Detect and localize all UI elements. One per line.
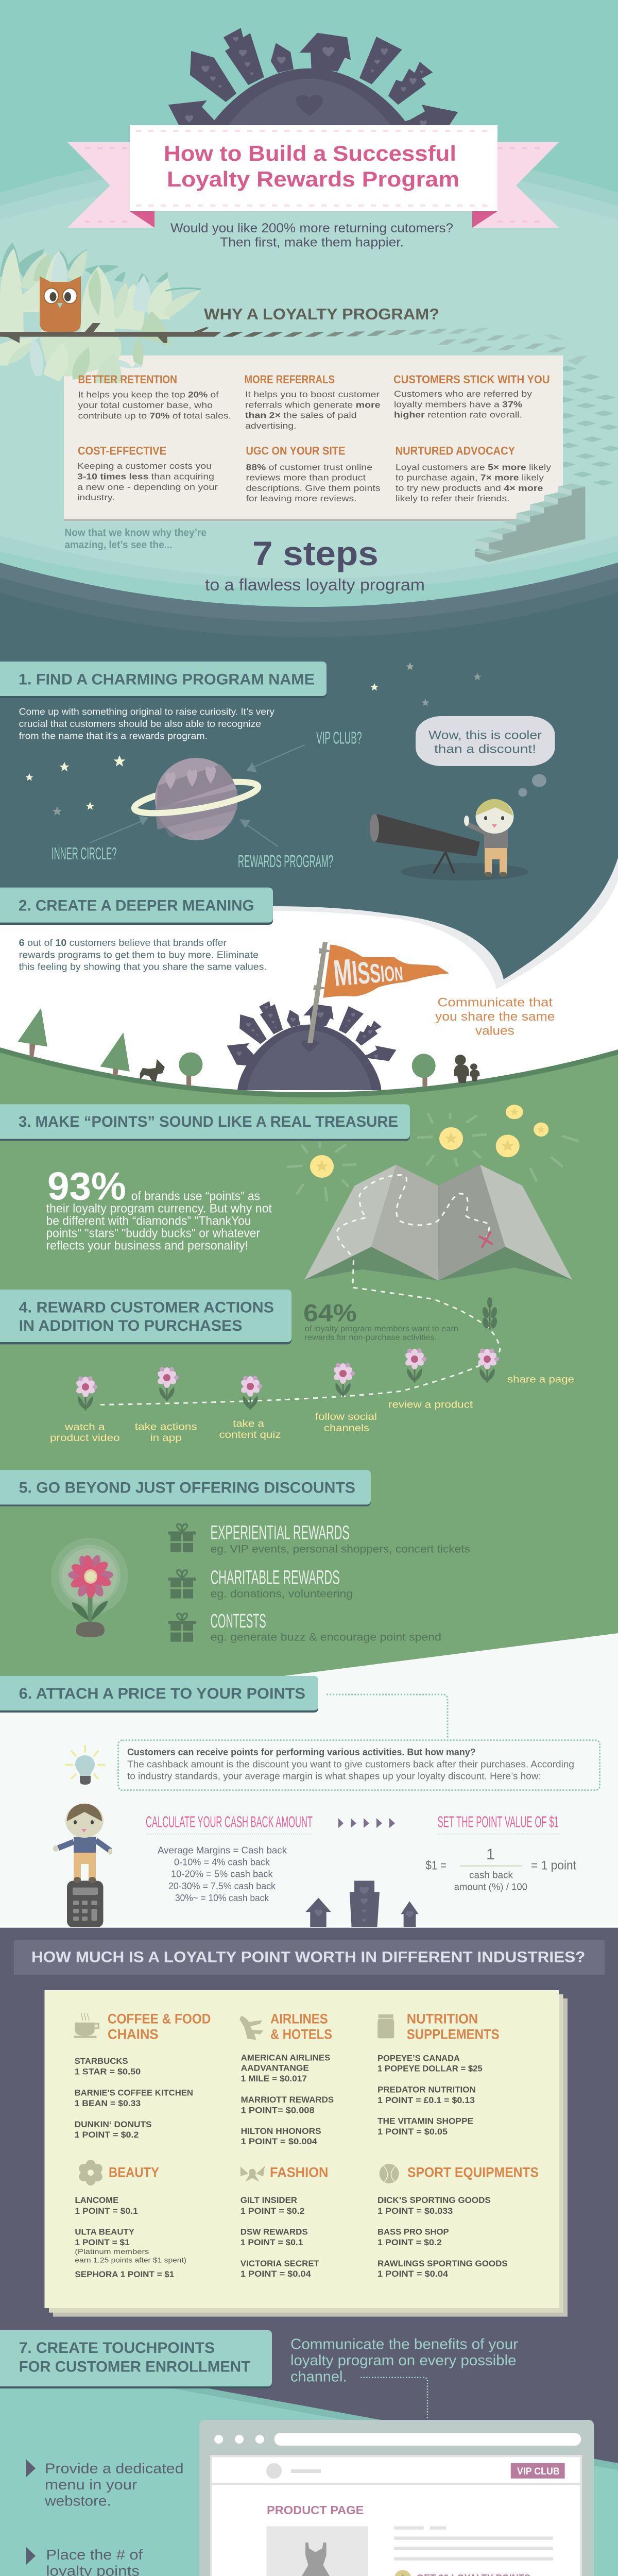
- category: sport equipments: DICK’S SPORTING GOODS: [377, 2196, 491, 2205]
- text: communicate that you share the same values: [435, 995, 555, 1038]
- category: coffee and food chains: 1 BEAN = $0.33: [75, 2099, 141, 2108]
- text: communicate that you share the same values: values: [475, 1024, 514, 1038]
- icon: flower take a quiz: [239, 1375, 263, 1410]
- heading: 7 steps: 7 steps: [252, 534, 379, 572]
- card: customers stick with you: CUSTOMERS STICK WITH YOU: [393, 373, 550, 386]
- icon: child on calculator: [53, 1804, 112, 1927]
- label: follow social channels: channels: [324, 1423, 369, 1434]
- icon: coffee cup: [74, 2013, 98, 2038]
- step 3 banner: [0, 1104, 410, 1141]
- step 2 body: this feeling by showing that you share the same values.: [19, 961, 267, 972]
- step 7 heading line two: FOR CUSTOMER ENROLLMENT: [19, 2358, 250, 2375]
- icon: tennis ball: [380, 2164, 399, 2183]
- category: coffee and food chains: 1 STAR = $0.50: [75, 2067, 141, 2077]
- icon: trees, dog and people: [18, 1008, 479, 1087]
- icon: coin rays: [287, 1113, 578, 1201]
- step 2 body: [19, 937, 267, 972]
- step 3 heading: 3. MAKE “POINTS” SOUND LIKE A REAL TREASURE: [19, 1113, 398, 1130]
- step 4 heading: 4. REWARD CUSTOMER ACTIONS: [19, 1299, 274, 1316]
- category: nutrition supplements: SUPPLEMENTS: [407, 2026, 500, 2042]
- title banner: [67, 125, 559, 228]
- icon: skyline: [305, 1881, 419, 1927]
- card: ugc on your site: reviews more than product: [246, 473, 366, 483]
- category: sport equipments: 1 POINT = $0.2: [377, 2238, 442, 2247]
- category: fashion: DSW REWARDS: [241, 2228, 308, 2237]
- stat: 64 percent: of loyalty program members want to earn: [305, 1325, 458, 1333]
- category: coffee and food chains: 1 POINT = $0.2: [75, 2130, 139, 2140]
- step 2 banner: [0, 888, 273, 925]
- text: now that we know: amazing, let’s see the...: [65, 539, 172, 551]
- step 7 banner: [0, 2330, 272, 2388]
- category: nutrition supplements: [377, 2011, 500, 2137]
- text: communicate the benefits: loyalty program on every possible: [290, 2352, 516, 2369]
- background: hill one: [0, 145, 618, 227]
- icon: glowing flower: [51, 1538, 128, 1637]
- icon: treasure map: [304, 1165, 572, 1280]
- background: green hill edge: [0, 1047, 618, 1133]
- panel background: why a loyalty program: [64, 355, 563, 521]
- background: purple section: [0, 1927, 618, 2576]
- callout: how many points: Customers can receive points for performing various activities. But how many?: [127, 1747, 476, 1757]
- category: beauty: earn 1.25 points after $1 spent): [75, 2257, 186, 2264]
- category: airlines and hotels: MARRIOTT REWARDS: [241, 2095, 334, 2105]
- label: share a page: share a page: [507, 1374, 574, 1385]
- card: ugc on your site: descriptions. Give them points: [246, 483, 380, 493]
- text: communicate that you share the same values: you share the same: [435, 1010, 555, 1024]
- table: margins to cash back: [158, 1845, 287, 1903]
- icon: sprig: [482, 1297, 498, 1330]
- icon: bottle: [377, 2014, 394, 2038]
- card: ugc on your site: 88% of customer trust online: [246, 462, 372, 472]
- subheading: to a flawless loyalty program: to a flawless loyalty program: [205, 575, 425, 594]
- category: airlines and hotels: 1 MILE = $0.017: [241, 2074, 307, 2083]
- item: experiential rewards: [211, 1522, 470, 1555]
- card: nurtured advocacy: likely to refer their friends.: [396, 494, 510, 503]
- left ribbon: [67, 142, 154, 228]
- step 1 body: from the name that it’s a rewards program.: [19, 730, 208, 741]
- callout: how many points: to industry standards, your average margin is what shapes up your loyalty discount. Here’s how:: [127, 1771, 541, 1782]
- card: more referrals: [244, 373, 380, 431]
- decorative dashes from the branch: [222, 328, 587, 365]
- background: hill three: [0, 175, 618, 227]
- card: ugc on your site: [246, 445, 380, 503]
- label: take a content quiz: take a: [233, 1419, 265, 1430]
- heading: product page: PRODUCT PAGE: [267, 2503, 364, 2517]
- card: more referrals: than 2× the sales of paid: [245, 411, 357, 420]
- background: light teal intro area: [0, 0, 618, 579]
- category: beauty: 1 POINT = $0.1: [75, 2207, 138, 2216]
- icon: foliage: [0, 243, 201, 383]
- label: take actions in app: take actions: [135, 1421, 197, 1432]
- background: sky: [0, 0, 618, 222]
- card: customers stick with you: [393, 373, 550, 420]
- card: ugc on your site: UGC ON YOUR SITE: [246, 445, 345, 457]
- text: now that we know: Now that we know why they’re: [65, 527, 207, 538]
- arrow: rewards program: [239, 819, 278, 846]
- category: fashion: [241, 2164, 329, 2279]
- card: nurtured advocacy: Loyal customers are 5× more likely: [396, 462, 552, 472]
- category: beauty: (Platinum members: [75, 2248, 149, 2256]
- stat: 93 percent: reflects your business and personality!: [46, 1239, 248, 1253]
- table: margins to cash back: 0-10% = 4% cash back: [174, 1857, 270, 1867]
- step 1 heading: 1. FIND A CHARMING PROGRAM NAME: [19, 671, 315, 688]
- background: pale section six: [0, 1633, 618, 1927]
- card: customers stick with you: loyalty members have a 37%: [394, 399, 522, 409]
- step 5 heading: 5. GO BEYOND JUST OFFERING DISCOUNTS: [19, 1479, 355, 1496]
- dotted connector two: [360, 2378, 427, 2419]
- icon: telescope and person: [370, 799, 528, 880]
- category: nutrition supplements: PREDATOR NUTRITION: [377, 2086, 476, 2095]
- background: dark teal swoosh section: [0, 515, 618, 979]
- icon: gift one: [168, 1524, 196, 1552]
- icon: coins: [310, 1105, 548, 1178]
- image: product dress: [266, 2526, 368, 2576]
- category: airlines and hotels: [239, 2011, 334, 2146]
- category: nutrition supplements: 1 POPEYE DOLLAR = $25: [377, 2064, 483, 2074]
- icon: flower share a page: [476, 1347, 500, 1383]
- list: provide a dedicated menu: webstore.: [44, 2493, 111, 2509]
- text: communicate the benefits: Communicate the benefits of your: [290, 2336, 518, 2352]
- step 2 body: rewards programs to get them to buy more. Eliminate: [19, 949, 259, 960]
- stat: 93 percent: [46, 1165, 272, 1253]
- table: margins to cash back: Average Margins = Cash back: [158, 1845, 287, 1855]
- label: review a product: review a product: [388, 1400, 473, 1411]
- subtitle: Would you like 200% more returning cutomers?: [170, 221, 453, 235]
- table: margins to cash back: 30%~ = 10% cash back: [175, 1893, 269, 1903]
- category: beauty: [75, 2160, 186, 2279]
- category: beauty: 1 POINT = $1: [75, 2238, 130, 2247]
- icon: beauty flower: [77, 2160, 105, 2185]
- step 6 banner: [0, 1676, 318, 1713]
- icon: flower watch video: [75, 1375, 98, 1411]
- category: airlines and hotels: & HOTELS: [270, 2026, 332, 2042]
- category: fashion: 1 POINT = $0.04: [241, 2269, 312, 2279]
- category: beauty: BEAUTY: [109, 2164, 159, 2180]
- step 5 banner: [0, 1470, 371, 1506]
- card: cost-effective: [77, 445, 218, 502]
- heading panel: loyalty point worth: [0, 1927, 618, 1975]
- formula: point value: amount (%) / 100: [454, 1882, 527, 1892]
- item: experiential rewards: EXPERIENTIAL REWARDS: [211, 1522, 350, 1544]
- step 4 heading line two: IN ADDITION TO PURCHASES: [19, 1317, 243, 1334]
- right ribbon: [472, 142, 559, 228]
- dotted connector: [327, 1694, 448, 1738]
- card: customers stick with you: higher retention rate overall.: [394, 410, 522, 420]
- label: inner circle: INNER CIRCLE?: [52, 844, 116, 863]
- callout: speech bubble: than a discount!: [434, 742, 536, 755]
- category: nutrition supplements: 1 POINT = £0.1 = $0.13: [377, 2096, 475, 2105]
- item: contests: eg. generate buzz & encourage point spend: [211, 1631, 441, 1643]
- stat: 93 percent: be different with “diamonds” "ThankYou: [46, 1214, 251, 1228]
- background: green section: [0, 1053, 618, 1700]
- card: cost-effective: COST-EFFECTIVE: [78, 445, 166, 457]
- step 1 body: Come up with something original to raise curiosity. It’s very: [19, 706, 275, 717]
- card: cost-effective: industry.: [77, 493, 115, 502]
- stat: 64 percent: 64%: [303, 1299, 357, 1327]
- text: communicate the benefits: channel.: [290, 2368, 347, 2385]
- icon: flower follow social: [332, 1362, 355, 1397]
- category: coffee and food chains: STARBUCKS: [75, 2057, 128, 2066]
- card: customers stick with you: Customers who are referred by: [394, 389, 533, 399]
- background: hill two: [0, 159, 618, 227]
- label: rewards program: REWARDS PROGRAM?: [238, 852, 333, 871]
- category: airlines and hotels: HILTON HHONORS: [241, 2127, 321, 2136]
- card: better retention: your total customer base, who: [78, 400, 213, 410]
- card: nurtured advocacy: NURTURED ADVOCACY: [396, 445, 515, 457]
- step 1 body: [19, 706, 275, 741]
- icon: branch: [0, 323, 221, 343]
- stars: [25, 663, 482, 816]
- category: coffee and food chains: [74, 2011, 211, 2140]
- icon: hero heart city emblem: [168, 28, 458, 181]
- icon: gift two: [168, 1570, 196, 1598]
- category: airlines and hotels: AMERICAN AIRLINES: [241, 2053, 330, 2062]
- category: sport equipments: RAWLINGS SPORTING GOODS: [377, 2259, 508, 2268]
- category: fashion: VICTORIA SECRET: [241, 2259, 319, 2268]
- stat: 93 percent: their loyalty program currency. But why not: [46, 1201, 272, 1216]
- callout: how many points: [118, 1740, 600, 1790]
- category: nutrition supplements: 1 POINT = $0.05: [377, 2127, 448, 2137]
- category: airlines and hotels: AIRLINES: [270, 2011, 328, 2026]
- icon: flower review a product: [404, 1347, 427, 1383]
- label: watch a product video: product video: [50, 1433, 120, 1444]
- step 1 body: crucial that customers should be also able to recognize: [19, 718, 261, 729]
- category: sport equipments: BASS PRO SHOP: [377, 2228, 449, 2237]
- icon: planet: [132, 758, 260, 840]
- category: coffee and food chains: COFFEE & FOOD: [108, 2011, 211, 2026]
- stat: 64 percent: rewards for non-purchase activities.: [305, 1333, 437, 1342]
- category: airlines and hotels: AADVANTANGE: [241, 2064, 309, 2073]
- category: nutrition supplements: THE VITAMIN SHOPPE: [377, 2117, 473, 2126]
- background: arc band one: [0, 0, 618, 590]
- background: white section two: [0, 876, 618, 1108]
- button: vip club: VIP CLUB: [517, 2466, 560, 2477]
- step 7 heading: 7. CREATE TOUCHPOINTS: [19, 2340, 215, 2357]
- card: more referrals: referrals which generate more: [245, 400, 380, 410]
- icon: small city emblem: [227, 1001, 397, 1090]
- list: place points on product page: [26, 2547, 159, 2576]
- list: provide a dedicated menu: menu in your: [45, 2477, 137, 2493]
- heading: calculate your cash back amount: CALCULATE YOUR CASH BACK AMOUNT: [146, 1812, 313, 1831]
- subtitle: Then first, make them happier.: [220, 235, 404, 249]
- item: charitable rewards: CHARITABLE REWARDS: [211, 1567, 340, 1589]
- icon: isometric stairs: [475, 483, 585, 562]
- icon: mission flag: [302, 942, 449, 1046]
- text: communicate that you share the same values: Communicate that: [438, 995, 553, 1009]
- item: charitable rewards: eg. donations, volunteering: [211, 1588, 353, 1600]
- list: provide a dedicated menu: [26, 2460, 184, 2509]
- text: now that we know: [65, 527, 207, 551]
- formula: point value: cash back: [469, 1870, 513, 1880]
- heading: why a loyalty program: WHY A LOYALTY PROGRAM?: [204, 305, 439, 323]
- background: teal section seven shadow: [174, 2388, 618, 2470]
- category: coffee and food chains: BARNIE'S COFFEE KITCHEN: [75, 2089, 193, 2098]
- step 4 banner: [0, 1290, 291, 1344]
- callout: speech bubble: Wow, this is cooler: [428, 728, 542, 742]
- decorative diamonds: [554, 366, 618, 485]
- category: fashion: 1 POINT = $0.1: [241, 2238, 303, 2247]
- card: ugc on your site: for leaving more reviews.: [246, 494, 356, 503]
- background: arc band three: [0, 0, 618, 622]
- stat: 64 percent: [303, 1299, 458, 1342]
- label: take a content quiz: [219, 1419, 281, 1440]
- item: contests: CONTESTS: [211, 1611, 266, 1632]
- arrow: vip club: [246, 745, 305, 772]
- label: follow social channels: follow social: [315, 1412, 377, 1422]
- background: arc band four: [0, 0, 618, 637]
- category: fashion: GILT INSIDER: [241, 2196, 297, 2205]
- mission label: MISSION: [332, 947, 404, 994]
- step 1 banner: [0, 662, 327, 698]
- category: nutrition supplements: NUTRITION: [407, 2011, 478, 2026]
- panel text: why a loyalty program: [77, 305, 552, 503]
- left fold: [130, 211, 154, 228]
- list: provide a dedicated menu: Provide a dedicated: [45, 2460, 184, 2476]
- product details: [394, 2526, 553, 2561]
- card: more referrals: MORE REFERRALS: [244, 373, 335, 386]
- card: nurtured advocacy: to try new products and 4× more: [396, 483, 543, 493]
- card: cost-effective: Keeping a customer costs you: [77, 461, 212, 471]
- category: fashion: 1 POINT = $0.2: [241, 2207, 305, 2216]
- stat: 93 percent: 93%: [47, 1165, 126, 1209]
- label: vip club: VIP CLUB?: [316, 728, 362, 747]
- title line two: Loyalty Rewards Program: [167, 167, 459, 191]
- step 2 body: 6 out of 10 customers believe that brands offer: [19, 937, 227, 948]
- card: cost-effective: a new one - depending on your: [77, 482, 218, 492]
- panel: industries paper: [44, 1990, 568, 2317]
- callout: speech bubble: [416, 716, 555, 796]
- white title card: [130, 125, 497, 211]
- category: beauty: ULTA BEAUTY: [75, 2228, 134, 2237]
- formula: point value: = 1 point: [531, 1858, 576, 1872]
- category: airlines and hotels: 1 POINT= $0.008: [241, 2106, 315, 2115]
- text: communicate the benefits: [290, 2336, 518, 2385]
- card: better retention: It helps you keep the top 20% of: [78, 390, 219, 400]
- stat: 93 percent: points" "stars" "buddy bucks" or whatever: [46, 1226, 260, 1240]
- table: margins to cash back: 20-30% = 7,5% cash back: [168, 1881, 276, 1891]
- icon: flower take actions: [156, 1366, 179, 1401]
- card: cost-effective: 3-10 times less than acquiring: [77, 472, 214, 481]
- category: sport equipments: [377, 2164, 539, 2279]
- arrows: chevrons: [338, 1818, 395, 1828]
- button: vip club: [511, 2463, 565, 2479]
- category: beauty: SEPHORA 1 POINT = $1: [75, 2270, 174, 2279]
- icon: owl: [40, 276, 81, 332]
- panel: browser mockup: [199, 2420, 594, 2576]
- card: better retention: BETTER RETENTION: [78, 373, 177, 386]
- arrow: inner circle: [90, 816, 148, 843]
- category: coffee and food chains: CHAINS: [108, 2026, 159, 2042]
- label: take actions in app: [135, 1421, 197, 1444]
- category: beauty: LANCOME: [75, 2196, 118, 2205]
- item: charitable rewards: [211, 1567, 353, 1600]
- step 2 heading: 2. CREATE A DEEPER MEANING: [19, 897, 254, 914]
- icon: plane: [239, 2016, 263, 2040]
- callout: how many points: The cashback amount is the discount you want to give customers back after their purchases. According: [127, 1759, 574, 1769]
- item: contests: [211, 1611, 441, 1643]
- category: fashion: FASHION: [270, 2164, 329, 2180]
- path: dashed trail: [100, 1260, 500, 1405]
- background: grey swoosh shadow: [0, 515, 618, 989]
- heading text: HOW MUCH IS A LOYALTY POINT WORTH IN DIFFERENT INDUSTRIES?: [31, 1949, 585, 1966]
- list: place points on product page: Place the # of: [46, 2547, 143, 2563]
- formula: point value: [425, 1846, 576, 1892]
- label: take actions in app: in app: [150, 1433, 182, 1444]
- right fold: [472, 211, 497, 228]
- title: How to Build a Successful: [164, 141, 456, 165]
- background: teal section seven: [0, 2388, 618, 2576]
- label: watch a product video: watch a: [64, 1422, 105, 1433]
- card: better retention: [78, 373, 231, 420]
- card: nurtured advocacy: to purchase again, 7× more likely: [396, 473, 544, 483]
- card: nurtured advocacy: [396, 445, 552, 503]
- table: margins to cash back: 10-20% = 5% cash back: [171, 1869, 273, 1879]
- card: more referrals: advertising.: [245, 421, 297, 431]
- label: follow social channels: [315, 1412, 377, 1434]
- category: nutrition supplements: POPEYE’S CANADA: [377, 2054, 460, 2063]
- category: sport equipments: 1 POINT = $0.033: [377, 2207, 453, 2216]
- label: take a content quiz: content quiz: [219, 1430, 281, 1440]
- category: sport equipments: 1 POINT = $0.04: [377, 2269, 449, 2279]
- formula: point value: 1: [486, 1846, 495, 1863]
- category: sport equipments: SPORT EQUIPMENTS: [407, 2164, 539, 2180]
- card: more referrals: It helps you to boost customer: [245, 389, 380, 399]
- stat: 93 percent: of brands use “points” as: [131, 1189, 260, 1203]
- label: watch a product video: [50, 1422, 120, 1444]
- icon: bow: [241, 2166, 265, 2182]
- formula: point value: $1 =: [425, 1858, 447, 1872]
- step 6 heading: 6. ATTACH A PRICE TO YOUR POINTS: [19, 1685, 305, 1702]
- icon: gift three: [168, 1614, 196, 1642]
- category: airlines and hotels: 1 POINT = $0.004: [241, 2137, 318, 2146]
- background: arc band two: [0, 0, 618, 607]
- category: coffee and food chains: DUNKIN‘ DONUTS: [75, 2120, 152, 2129]
- icon: light bulb: [65, 1745, 105, 1785]
- icon: loyalty coin: [394, 2570, 411, 2576]
- subtitle: [170, 221, 453, 249]
- item: experiential rewards: eg. VIP events, personal shoppers, concert tickets: [211, 1543, 470, 1555]
- card: better retention: contribute up to 70% of total sales.: [78, 411, 231, 420]
